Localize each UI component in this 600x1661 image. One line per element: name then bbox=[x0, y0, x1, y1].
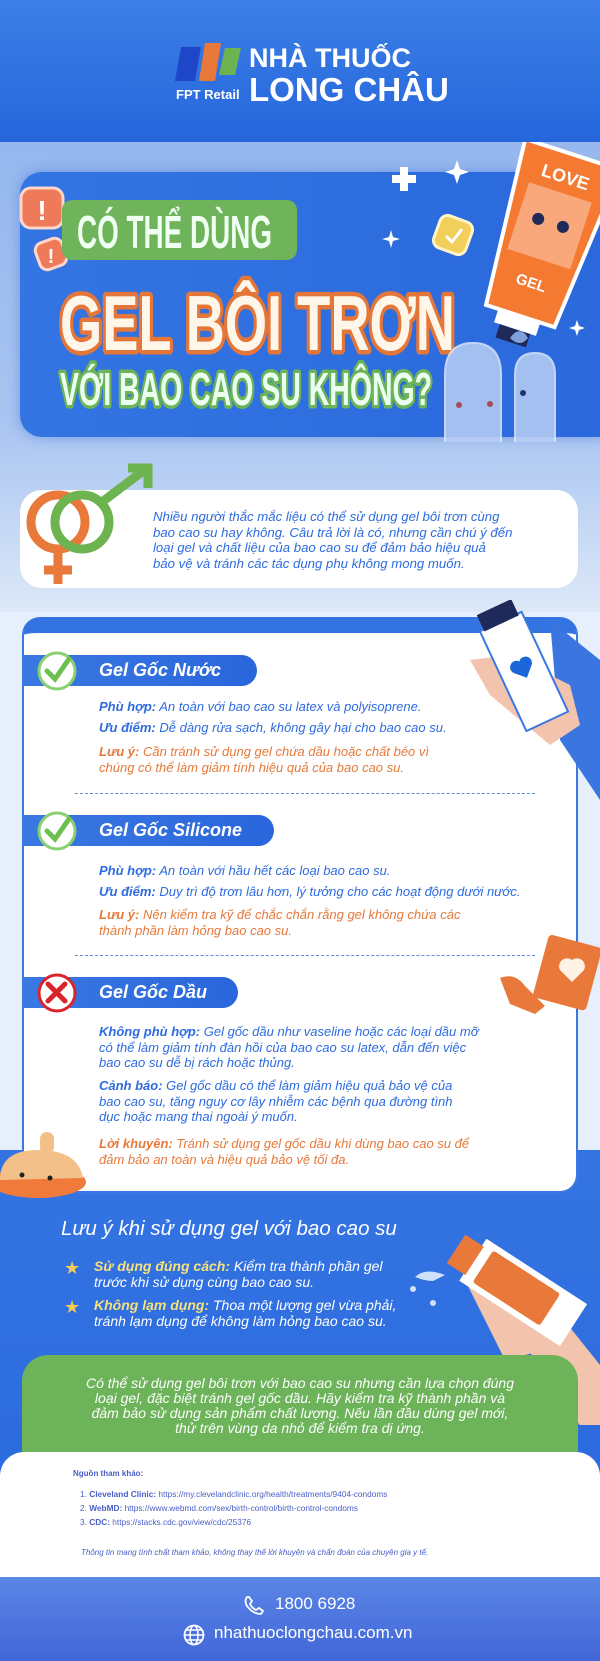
icon: condom character bbox=[0, 1132, 86, 1198]
section: silicone gel: thành phần làm hỏng bao cao su. bbox=[99, 922, 292, 938]
pill: Gel Gốc Silicone: Gel Gốc Silicone bbox=[99, 820, 242, 840]
text: brand name bbox=[249, 43, 449, 108]
icon: red x bbox=[38, 974, 76, 1012]
text: intro: Nhiều người thắc mắc liệu có thể sử dụng gel bôi trơn cùng bbox=[153, 509, 499, 524]
text: disclaimer: Thông tin mang tính chất tham khảo, không thay thế lời khuyên và chẩn đoán của chuyên gia y tế. bbox=[81, 1548, 428, 1557]
intro card bbox=[20, 490, 578, 588]
text: sources list: 3. CDC: https://stacks.cdc.gov/view/cdc/25376 bbox=[80, 1517, 251, 1527]
heading: usage notes: Lưu ý khi sử dụng gel với bao cao su bbox=[61, 1217, 397, 1240]
text: conclusion: loại gel, đặc biệt tránh gel gốc dầu. Hãy kiểm tra kỹ thành phần và bbox=[95, 1390, 505, 1406]
text: details: Phù hợp: An toàn với hầu hết các loại bao cao su. bbox=[99, 863, 390, 878]
text: sources list: 2. WebMD: https://www.webmd.com/sex/birth-control/birth-control-condoms bbox=[80, 1503, 358, 1513]
pill: Gel Gốc Dầu: Gel Gốc Dầu bbox=[99, 982, 207, 1002]
icon: gender symbol bbox=[26, 464, 152, 584]
icon: yellow check badge bbox=[431, 213, 475, 257]
contact: phone bbox=[244, 1594, 355, 1615]
icon: sparkles and cross bbox=[382, 160, 585, 336]
icon: star: ★ bbox=[64, 1297, 80, 1317]
section: water-based gel bbox=[24, 652, 447, 774]
text: conclusion: Có thể sử dụng gel bôi trơn với bao cao su nhưng cần lựa chọn đúng bbox=[86, 1375, 514, 1391]
section: oil-based gel: dục hoặc mang thai ngoài ý muốn. bbox=[99, 1109, 298, 1124]
text: bullet 2: Không lạm dụng: Thoa một lượng gel vừa phải, bbox=[94, 1297, 396, 1313]
icon: hand squeezing tube bbox=[410, 1234, 600, 1425]
text: sources heading: Nguồn tham khảo: bbox=[73, 1469, 143, 1478]
hero background bbox=[0, 142, 600, 612]
text: FPT Retail: FPT Retail bbox=[176, 87, 240, 102]
text: sources list: 1. Cleveland Clinic: https://my.clevelandclinic.org/health/treatments/9404-condoms bbox=[80, 1489, 387, 1499]
section: oil-based gel: bao cao su, tăng nguy cơ lây nhiễm các bệnh qua đường tình bbox=[99, 1094, 453, 1108]
pill: Gel Gốc Silicone bbox=[22, 815, 274, 846]
icon: globe bbox=[184, 1624, 204, 1646]
panel: references bbox=[0, 1452, 600, 1578]
icon: love gel tube: GEL bbox=[514, 270, 548, 296]
icon: green check bbox=[38, 812, 76, 850]
panel: conclusion bbox=[22, 1355, 578, 1475]
text: bullet 1: trước khi sử dụng cùng bao cao su. bbox=[94, 1274, 314, 1290]
blue bottom band bbox=[0, 1150, 600, 1580]
icon: hand with blue tube bbox=[470, 600, 600, 800]
pill: Gel Gốc Nước bbox=[22, 655, 257, 686]
footer bbox=[0, 1577, 600, 1661]
text: bullet 1 bbox=[94, 1258, 383, 1290]
section: water-based gel: chúng có thể làm giảm tính hiệu quả của bao cao su. bbox=[99, 760, 404, 774]
icon: alert bubbles bbox=[21, 188, 69, 272]
green pill: có thể dùng bbox=[62, 200, 297, 260]
section: silicone gel: Lưu ý: Nên kiểm tra kỹ để chắc chắn rằng gel không chứa các bbox=[99, 907, 460, 922]
icon: love gel tube bbox=[464, 139, 600, 358]
text: details: bao cao su dễ bị rách hoặc thủng. bbox=[99, 1055, 295, 1070]
text: bullet 2 bbox=[94, 1297, 396, 1329]
text: brand name: NHÀ THUỐC bbox=[249, 43, 411, 73]
icon: phone bbox=[244, 1596, 264, 1615]
icon: alert bubbles: ! bbox=[48, 246, 54, 268]
text: brand name: LONG CHÂU bbox=[249, 71, 449, 108]
section: silicone gel: Ưu điểm: Duy trì độ trơn lâu hơn, lý tưởng cho các hoạt động dưới nước. bbox=[99, 884, 520, 899]
hero panel bbox=[20, 172, 600, 437]
section: oil-based gel: đảm bảo an toàn và hiệu quả bảo vệ tối đa. bbox=[99, 1152, 349, 1166]
section: oil-based gel: Cảnh báo: Gel gốc dầu có thể làm giảm hiệu quả bảo vệ của bbox=[99, 1078, 452, 1093]
icon: orange condom packet bbox=[500, 935, 600, 1014]
text: details: Phù hợp: An toàn với bao cao su latex và polyisoprene. bbox=[99, 699, 421, 714]
bullet list bbox=[64, 1258, 396, 1329]
icon: green check bbox=[38, 652, 76, 690]
text: intro: bao cao su hay không. Câu trả lời là có, nhưng cần chú ý đến bbox=[153, 524, 512, 540]
icon: condoms bbox=[438, 331, 572, 493]
text: intro bbox=[153, 509, 512, 570]
pill: Gel Gốc Dầu bbox=[22, 977, 238, 1008]
section: oil-based gel bbox=[24, 974, 480, 1166]
text: conclusion: đảm bảo sử dụng sản phẩm chất lượng. Nếu lần đầu dùng gel mới, bbox=[92, 1405, 508, 1421]
icon: alert bubbles: ! bbox=[37, 195, 47, 226]
logo: FPT Retail bbox=[175, 43, 449, 108]
text: details: có thể làm giảm tính đàn hồi của bao cao su latex, dẫn đến việc bbox=[99, 1040, 466, 1054]
section: water-based gel: Ưu điểm: Dễ dàng rửa sạch, không gây hại cho bao cao su. bbox=[99, 720, 447, 735]
text: conclusion bbox=[86, 1375, 514, 1436]
icon: love gel tube: LOVE bbox=[539, 160, 592, 194]
section: silicone gel bbox=[24, 812, 520, 938]
header bbox=[0, 0, 600, 142]
contact: phone: 1800 6928 bbox=[275, 1594, 355, 1613]
contact: website: nhathuoclongchau.com.vn bbox=[214, 1623, 412, 1642]
green pill: có thể dùng: CÓ THỂ DÙNG bbox=[77, 206, 272, 258]
pill: Gel Gốc Nước: Gel Gốc Nước bbox=[99, 660, 221, 680]
text: intro: loại gel và chất liệu của bao cao su để đảm bảo hiệu quả bbox=[153, 540, 486, 555]
text: details bbox=[99, 1024, 480, 1070]
panel: gel types card bbox=[22, 617, 578, 1193]
text: intro: bảo vệ và tránh các tác dụng phụ không mong muốn. bbox=[153, 556, 465, 570]
icon: fpt logo bbox=[175, 43, 241, 81]
icon: star: ★ bbox=[64, 1258, 80, 1278]
text: conclusion: thử trên vùng da nhỏ để kiểm tra dị ứng. bbox=[175, 1420, 425, 1436]
section: oil-based gel: Lời khuyên: Tránh sử dụng gel gốc dầu khi dùng bao cao su để bbox=[99, 1136, 469, 1151]
text: details: Không phù hợp: Gel gốc dầu như vaseline hoặc các loại dầu mỡ bbox=[99, 1024, 479, 1039]
text: sources list bbox=[80, 1489, 388, 1527]
hero title bbox=[20, 142, 600, 442]
section: water-based gel: Lưu ý: Cần tránh sử dụng gel chứa dầu hoặc chất béo vì bbox=[99, 744, 429, 759]
text: bullet 2: tránh lạm dụng để không làm hỏng bao cao su. bbox=[94, 1312, 387, 1328]
text: bullet 1: Sử dụng đúng cách: Kiểm tra thành phần gel bbox=[94, 1258, 383, 1274]
